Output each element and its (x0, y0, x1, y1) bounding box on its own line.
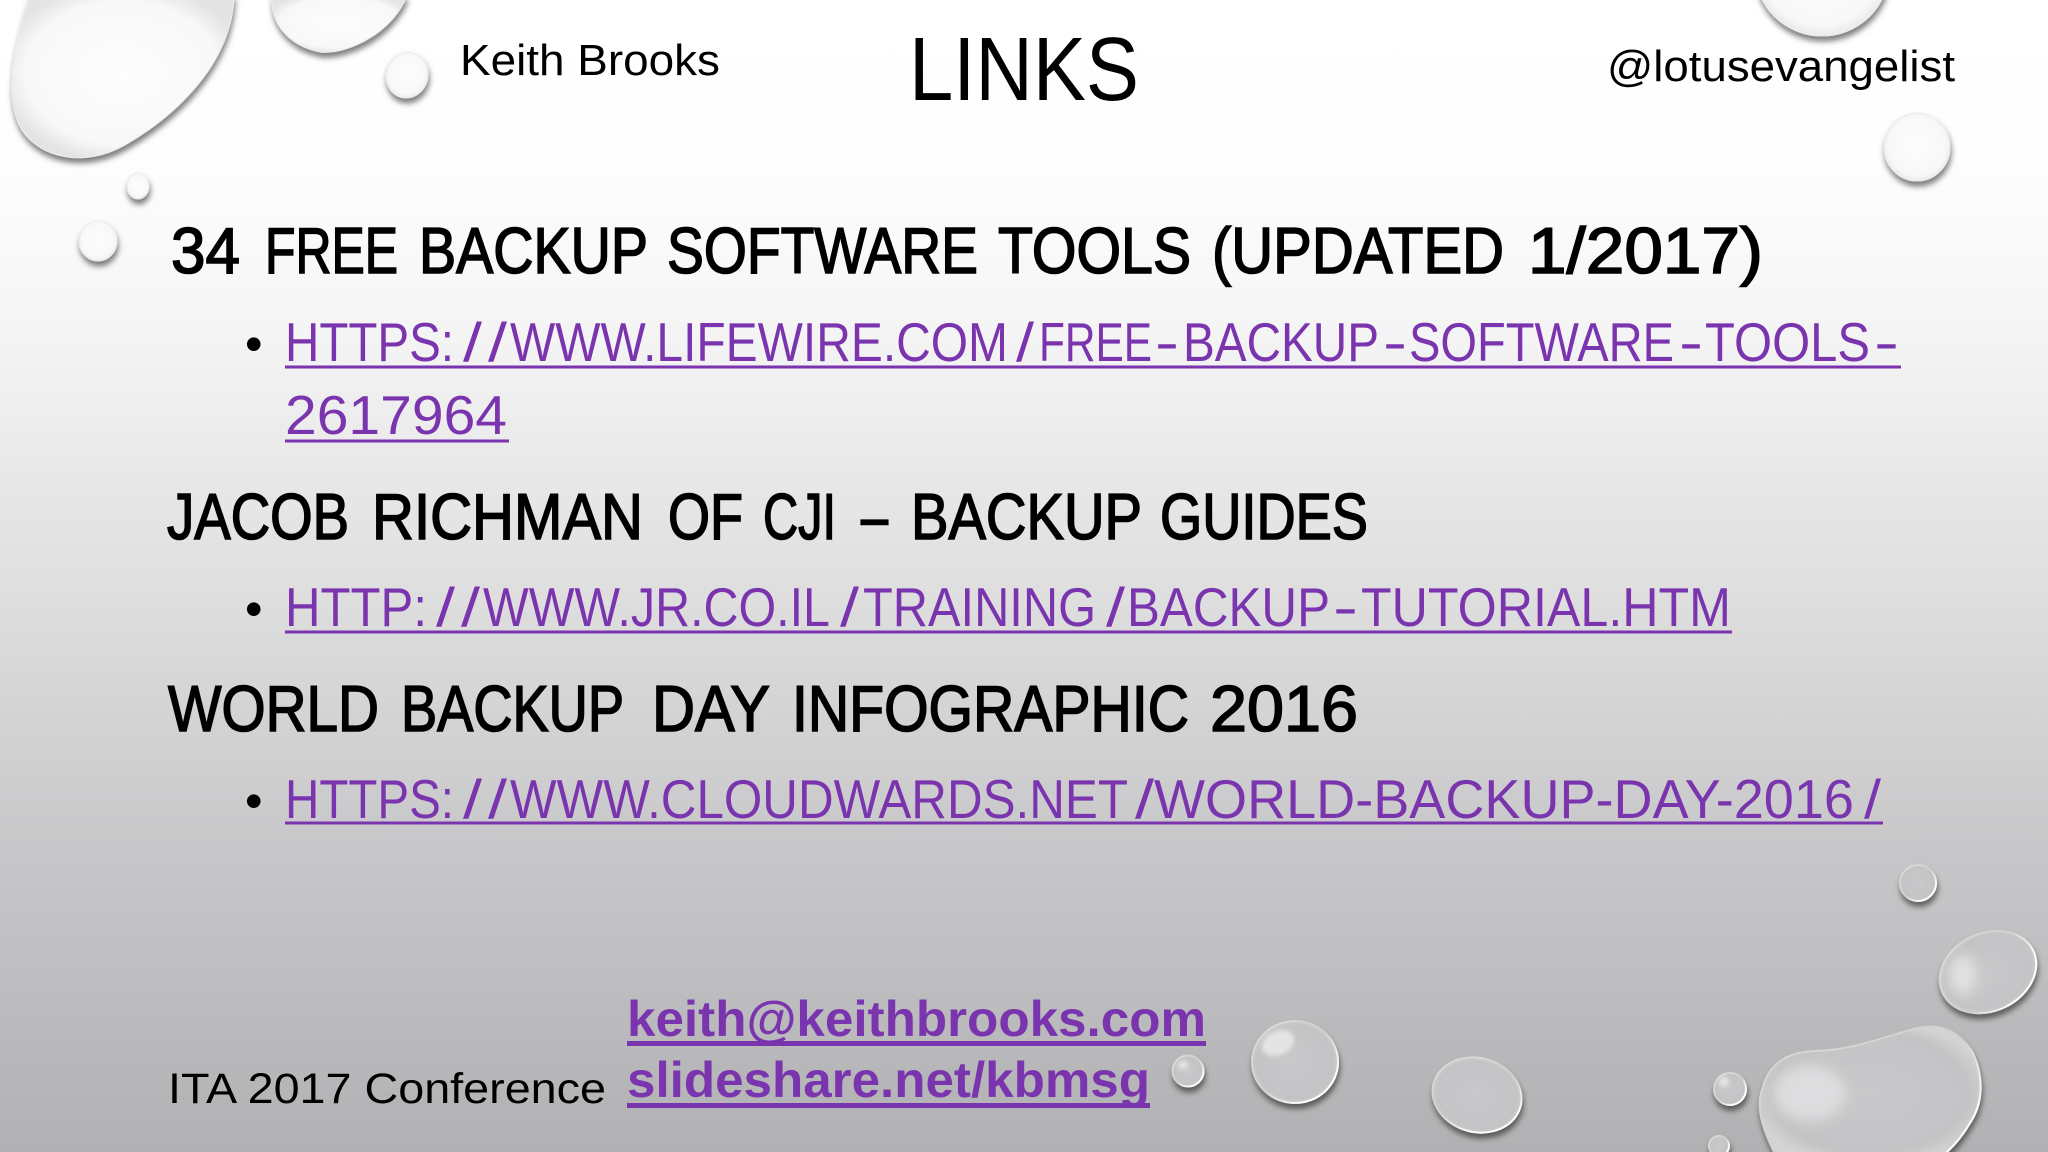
heading: backup guides: BACKUP (911, 480, 1142, 553)
link: jr.co.il: / (1106, 576, 1126, 638)
link: lifewire: / (463, 311, 483, 373)
heading: infographic (168, 672, 1358, 745)
link: cloudwards: / (1864, 768, 1882, 830)
heading: backup guides: OF (668, 480, 743, 553)
heading: backup tools: SOFTWARE (667, 214, 978, 287)
heading: backup guides: – (861, 480, 889, 553)
heading: infographic: WORLD (168, 672, 379, 745)
link: jr.co.il: - (1333, 576, 1358, 638)
heading: backup tools: TOOLS (998, 214, 1191, 287)
link: jr.co.il: HTTP: (285, 576, 427, 638)
link: cloudwards: HTTPS: (285, 768, 454, 830)
link: lifewire: HTTPS: (285, 311, 454, 373)
link: cloudwards: WWW.CLOUDWARDS.NET (510, 768, 1128, 830)
link: jr.co.il: / (436, 576, 456, 638)
link: lifewire: TOOLS (1705, 311, 1870, 373)
link: lifewire: 2617964 (285, 384, 507, 446)
heading: infographic: INFOGRAPHIC (792, 672, 1189, 745)
link: cloudwards: / (463, 768, 483, 830)
heading: backup tools: BACKUP (419, 214, 648, 287)
link: lifewire: / (488, 311, 508, 373)
link: lifewire: - (1383, 311, 1407, 373)
heading: backup tools: FREE (265, 214, 398, 287)
link: lifewire: - (1679, 311, 1703, 373)
link: lifewire: • (245, 316, 263, 372)
link: lifewire: WWW.LIFEWIRE.COM (510, 311, 1008, 373)
footer: contact links: slideshare.net/kbmsg (627, 1052, 1150, 1108)
link: lifewire: - (1874, 311, 1899, 373)
title: LINKS (909, 20, 1139, 120)
link: lifewire: - (1155, 311, 1179, 373)
heading: backup tools (171, 214, 1763, 287)
link: jr.co.il: • (245, 581, 263, 637)
link: cloudwards: / (1135, 768, 1155, 830)
water drops bottom centre (1172, 1021, 1530, 1142)
heading: backup tools: 1/2017) (1528, 214, 1763, 287)
link: cloudwards (245, 768, 1883, 830)
link: jr.co.il: / (461, 576, 481, 638)
link: lifewire: BACKUP (1183, 311, 1379, 373)
water drops bottom right (1709, 865, 2048, 1152)
footer: contact links (627, 991, 1206, 1108)
link: jr.co.il: WWW.JR.CO.IL (483, 576, 830, 638)
heading: backup tools: 34 (171, 214, 240, 287)
heading: infographic: 2016 (1210, 672, 1358, 745)
link: jr.co.il: / (840, 576, 860, 638)
footer: contact links: keith@keithbrooks.com (627, 991, 1206, 1047)
heading: infographic: DAY (652, 672, 770, 745)
heading: backup guides: JACOB (167, 480, 349, 553)
link: lifewire: SOFTWARE (1409, 311, 1674, 373)
water drops top left (12, 0, 432, 261)
heading: backup guides: RICHMAN (372, 480, 643, 553)
link: lifewire: FREE (1039, 311, 1152, 373)
heading: backup tools: (UPDATED (1212, 214, 1504, 287)
link: jr.co.il (245, 576, 1732, 638)
link: cloudwards: WORLD-BACKUP-DAY-2016 (1154, 768, 1854, 830)
link: jr.co.il: BACKUP (1127, 576, 1330, 638)
footer: conference: ITA 2017 Conference (168, 1065, 606, 1113)
heading: backup guides: GUIDES (1160, 480, 1368, 553)
author name: Keith Brooks (460, 36, 720, 85)
heading: backup guides (167, 480, 1368, 553)
link: cloudwards: / (488, 768, 508, 830)
heading: backup guides: CJI (763, 480, 836, 553)
link: lifewire: / (1016, 311, 1035, 373)
twitter handle: @lotusevangelist (1607, 42, 1955, 91)
link: jr.co.il: TRAINING (863, 576, 1096, 638)
water drops top right (1755, 0, 1950, 181)
link: jr.co.il: TUTORIAL.HTM (1361, 576, 1731, 638)
link: lifewire (245, 311, 1901, 446)
heading: infographic: BACKUP (401, 672, 624, 745)
link: cloudwards: • (245, 773, 263, 829)
